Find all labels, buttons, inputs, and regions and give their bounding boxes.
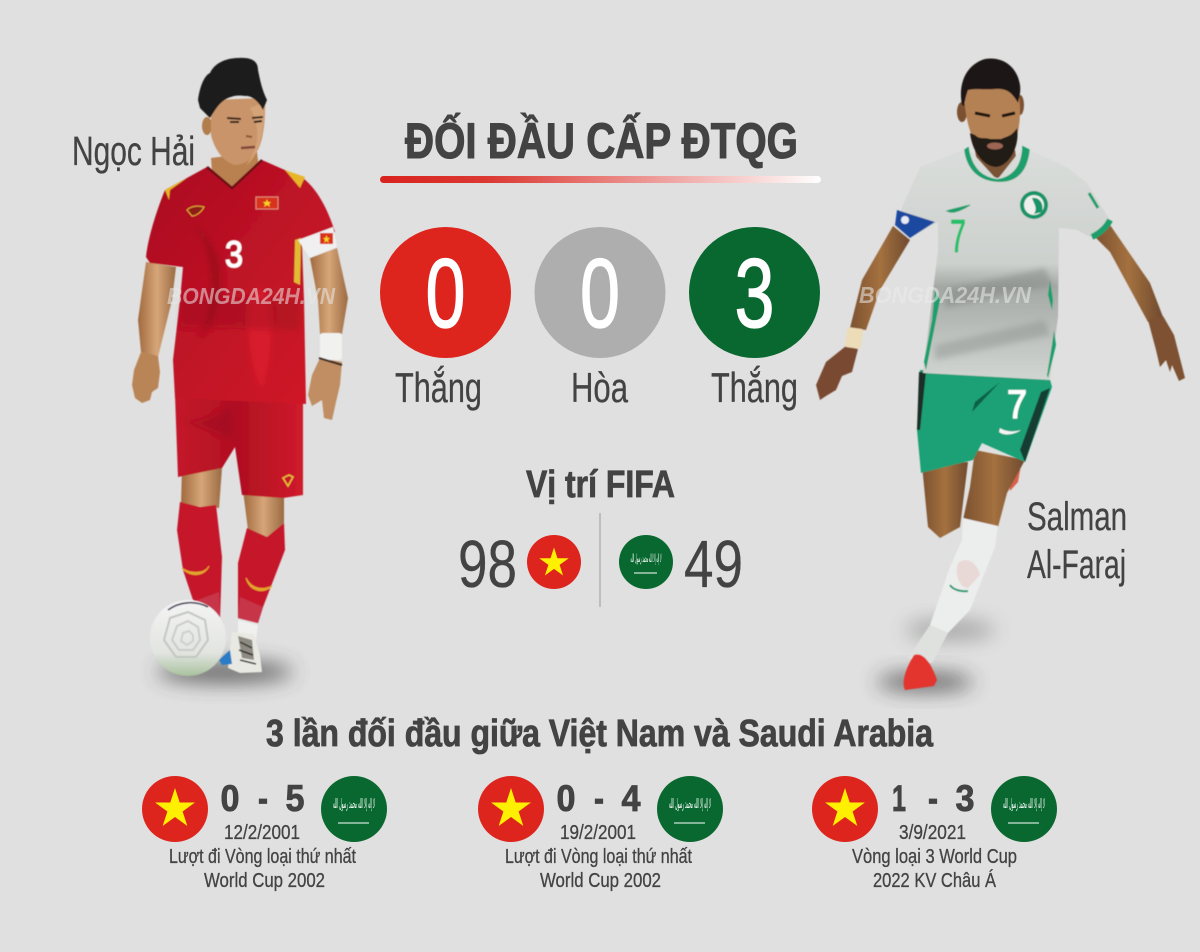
stat: draws: Hòa xyxy=(571,364,628,411)
match details: 12/2/2001 xyxy=(224,822,300,844)
label: Salman Al-Faraj: Al-Faraj xyxy=(1027,543,1126,587)
player: Ngọc Hải xyxy=(132,58,348,676)
flag: Saudi Arabia xyxy=(321,776,387,842)
score xyxy=(220,778,304,819)
match details: 2022 KV Châu Á xyxy=(873,869,997,892)
text: لا إله إلا الله محمد رسول الله xyxy=(1003,797,1045,812)
stat: draws: 0 xyxy=(580,238,620,348)
hair xyxy=(961,58,1020,106)
FIFA rank Vietnam: 98 xyxy=(458,527,517,602)
match details xyxy=(505,822,692,892)
match details: 3/9/2021 xyxy=(899,822,966,844)
stat: Vietnam wins xyxy=(380,227,511,411)
label: Salman Al-Faraj xyxy=(1027,495,1127,587)
score: 3 xyxy=(956,778,974,819)
stat: Vietnam wins: Thắng xyxy=(395,364,482,411)
FIFA divider xyxy=(599,513,601,607)
stat: draws xyxy=(534,227,666,411)
hair xyxy=(198,58,267,118)
score: 0 xyxy=(556,778,576,819)
match 3 xyxy=(812,776,1057,892)
FIFA rank Saudi Arabia xyxy=(619,527,743,602)
jersey xyxy=(146,160,337,404)
score: 4 xyxy=(622,778,641,819)
flag: Saudi Arabia xyxy=(657,776,723,842)
boot xyxy=(904,654,937,690)
score xyxy=(556,778,641,819)
boot xyxy=(219,620,262,673)
flag: Saudi Arabia xyxy=(991,776,1057,842)
watermark right: BONGDA24H.VN xyxy=(859,282,1031,308)
match details: Lượt đi Vòng loại thứ nhất xyxy=(169,846,356,868)
ground shadow under Ngọc Hải xyxy=(157,661,293,683)
match details: World Cup 2002 xyxy=(540,870,661,892)
legs xyxy=(177,468,285,623)
score: - xyxy=(928,778,938,819)
match details xyxy=(169,822,356,892)
title underline gradient bar xyxy=(380,176,821,183)
arms and hands xyxy=(816,222,1185,400)
score: - xyxy=(594,778,604,819)
FIFA rank Saudi Arabia: 49 xyxy=(684,527,743,602)
neck xyxy=(975,150,1018,178)
match details: World Cup 2002 xyxy=(204,870,325,892)
flag: Vietnam xyxy=(142,776,208,842)
stat: Saudi wins: 3 xyxy=(734,238,774,348)
football xyxy=(150,600,226,676)
text: لا إله إلا الله محمد رسول الله xyxy=(333,797,375,812)
player: Salman Al-Faraj xyxy=(816,58,1185,690)
section heading: 3 lần đối đầu giữa Việt Nam và Saudi Arabia xyxy=(266,713,934,755)
stat: Vietnam wins: 0 xyxy=(426,238,466,348)
match details xyxy=(852,822,1017,892)
match details: Lượt đi Vòng loại thứ nhất xyxy=(505,846,692,868)
match 2 xyxy=(478,776,723,892)
score: 0 xyxy=(220,778,240,819)
head xyxy=(957,88,1024,167)
ground shadows under Salman Al-Faraj xyxy=(877,621,995,691)
score: 1 xyxy=(892,778,906,819)
label: Salman Al-Faraj: Salman xyxy=(1027,495,1127,539)
title: ĐỐI ĐẦU CẤP ĐTQG xyxy=(405,112,798,169)
jersey number: 3 xyxy=(225,234,243,275)
short number: 7 xyxy=(1007,383,1027,427)
text: لا إله إلا الله محمد رسول الله xyxy=(669,797,711,812)
shorts xyxy=(175,395,303,498)
stat: Saudi wins: Thắng xyxy=(711,364,798,411)
head xyxy=(202,98,265,165)
score xyxy=(892,778,974,819)
stat: Saudi wins xyxy=(689,227,820,411)
jersey xyxy=(895,147,1110,380)
FIFA rank Vietnam xyxy=(458,527,581,602)
label: Ngọc Hải: Ngọc Hải xyxy=(72,128,195,174)
match 1 xyxy=(142,776,387,892)
flag: Vietnam xyxy=(478,776,544,842)
watermark left: BONGDA24H.VN xyxy=(167,283,335,309)
FIFA rank Saudi Arabia: لا إله إلا الله محمد رسول الله xyxy=(630,552,662,565)
jersey number: 7 xyxy=(950,210,966,262)
shorts xyxy=(917,370,1052,473)
legs xyxy=(908,450,1025,663)
neck xyxy=(211,152,259,188)
match details: Vòng loại 3 World Cup xyxy=(852,846,1017,868)
arms and hands xyxy=(132,248,348,420)
score: - xyxy=(258,778,268,819)
score: 5 xyxy=(286,778,304,819)
flag: Vietnam xyxy=(812,776,878,842)
FIFA heading: Vị trí FIFA xyxy=(526,464,675,506)
match details: 19/2/2001 xyxy=(560,822,636,844)
